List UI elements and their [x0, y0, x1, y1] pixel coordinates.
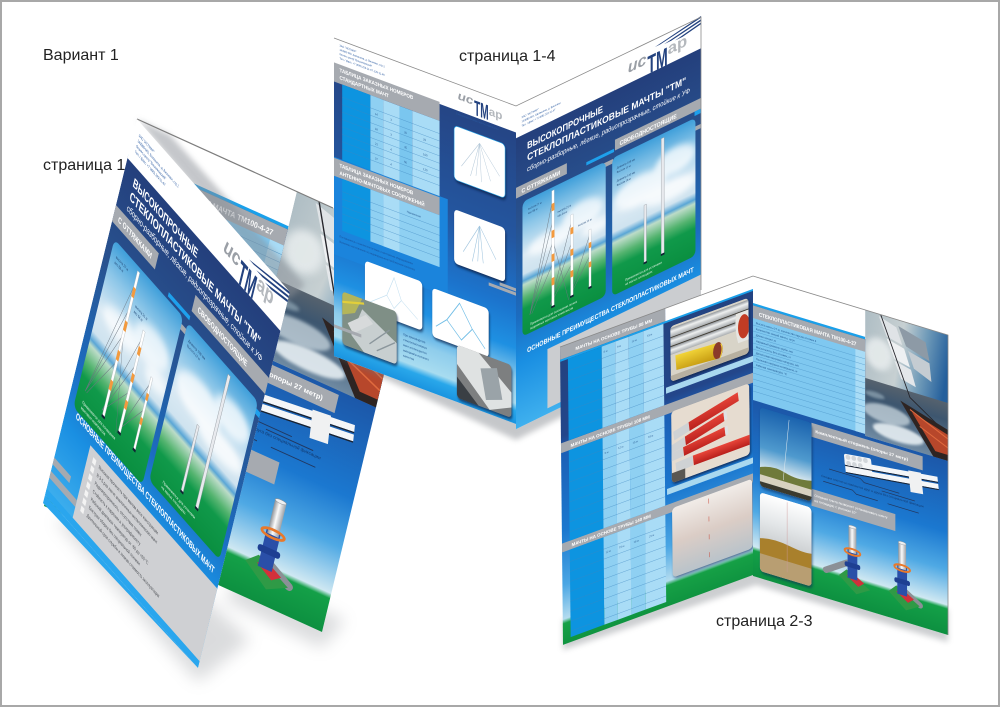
table 1: 4: [390, 147, 392, 152]
tab: guyed: С ОТТЯЖКАМИ: [522, 170, 560, 195]
table values: 21 м: [649, 533, 654, 538]
spec list: [756, 321, 817, 385]
table 1: 27: [375, 156, 378, 162]
page label 1-4 left: страница 1-4: [43, 157, 140, 174]
bottom stripe: [45, 488, 200, 668]
note: подвижных мачтовых комплексов: [530, 306, 573, 331]
note: на малых площадках: [161, 485, 186, 516]
logo: ис: [222, 234, 243, 273]
logo: ТМ: [234, 253, 260, 307]
tab: guyed: [516, 163, 567, 199]
advantages heading: ОСНОВНЫЕ ПРЕИМУЩЕСТВА СТЕКЛОПЛАСТИКОВЫХ МАЧТ: [527, 266, 694, 355]
logo: ТМ: [647, 43, 668, 81]
table 1: 18: [375, 126, 378, 132]
back panel table heading: СТЕКЛОПЛАСТИКОВАЯ МАЧТА ТМ100-4-27: [133, 165, 274, 237]
card: diagram 3: [365, 260, 423, 333]
logo: ар: [668, 32, 687, 59]
advantages text: Стойкость к коррозии и ультрафиолету: [92, 488, 141, 547]
note: Применяются для установки: [625, 260, 662, 282]
main title: СТЕКЛОПЛАСТИКОВЫЕ МАЧТЫ "ТМ": [128, 190, 261, 349]
table values: 12 м: [618, 444, 624, 450]
table heading 108 mm: МАЧТЫ НА ОСНОВЕ ТРУБЫ 108 ММ: [571, 414, 650, 448]
table values: [604, 332, 654, 554]
advantages text: Высокая прочность при малом весе конструкции: [98, 464, 159, 536]
bottom stripes: [334, 220, 516, 395]
advantages text: Длительный срок службы и низкая стоимость эксплуатации: [86, 512, 160, 600]
table 1: 20: [404, 130, 407, 135]
front panel bottom edge wedge: [43, 495, 198, 668]
top edges centre brochure: [334, 17, 701, 290]
note text: мачт используются: [403, 343, 427, 356]
page label 1-4 top: страница 1-4: [459, 48, 556, 65]
specs: [617, 157, 635, 187]
logo: ар: [489, 105, 503, 123]
brochure centre: panel page 4: [334, 38, 516, 424]
address block: бизнес-центр "Вишняковский": [339, 52, 372, 68]
main title: ВЫСОКОПРОЧНЫЕ: [527, 104, 603, 152]
table heading: СТЕКЛОПЛАСТИКОВАЯ МАЧТА ТМ100-4-27: [759, 312, 856, 348]
table 1: 25: [423, 137, 426, 142]
table values: 15 м: [619, 544, 625, 549]
photo: cable drums: [342, 291, 398, 367]
logo: ис: [458, 90, 474, 108]
table 1: 3: [390, 132, 392, 137]
advantages text: Быстрая сборка без специальной техники: [88, 504, 141, 567]
table values: 9 м: [605, 450, 609, 455]
table 2 heading bar: [334, 158, 440, 215]
address block: Тел. / факс: +7 (495) 229-11-47: [522, 107, 556, 128]
table 1: 35: [404, 145, 407, 150]
note text: [403, 332, 429, 367]
foundation note: на площадке с уклоном 10°: [814, 499, 857, 516]
top edge brochure right: [560, 276, 948, 635]
main title: ВЫСОКОПРОЧНЫЕ: [132, 176, 199, 262]
spec list: Наружный диаметр трубы, мм: [756, 339, 793, 354]
tab: free-standing: СВОБОДНОСТОЯЩИЕ: [197, 304, 248, 369]
page label 2-3: страница 2-3: [716, 613, 813, 630]
specs: Диаметр 140 мм: [617, 170, 635, 183]
table 1: [342, 85, 440, 196]
tab: guyed: С ОТТЯЖКАМИ: [117, 214, 153, 261]
address block: 143989 МО, Балашиха, д. Вишняки: [522, 100, 561, 124]
specs: [114, 256, 148, 322]
sky panel: guyed masts: [522, 161, 608, 337]
card: diagram 4: [432, 288, 490, 360]
main title: сборно-разборные, лёгкие, радиопрозрачные, стойкие к УФ: [126, 203, 263, 365]
logo tagline: Стеклопластиковые мачты, композиты: [456, 111, 498, 131]
advantages text: Радиопрозрачность, отсутствие помех: [94, 480, 143, 538]
table values: 15 м: [647, 332, 652, 338]
specs: высота 27 м: [528, 200, 542, 211]
sub-heading: Комплектный стержень (опоры 27 метр): [815, 429, 909, 462]
table heading 88 mm: МАЧТЫ НА ОСНОВЕ ТРУБЫ 88 ММ: [575, 318, 652, 351]
bright block left under tables: [334, 157, 448, 297]
address block: Тел. / факс: +7 (495) 229-11-47: [134, 149, 166, 188]
note: Применяются для установки: [162, 480, 195, 520]
table 2 heading bar: ТАБЛИЦА ЗАКАЗНЫХ НОМЕРОВ: [339, 163, 413, 197]
advantages text: [86, 465, 160, 598]
table 1: 120: [423, 167, 428, 173]
table 2: [342, 179, 440, 267]
table 1: 4: [390, 162, 392, 167]
advantages heading: ОСНОВНЫЕ ПРЕИМУЩЕСТВА СТЕКЛОПЛАСТИКОВЫХ МАЧТ: [75, 410, 216, 576]
specs: высота 27 м: [115, 255, 129, 273]
table 1: 3: [390, 117, 392, 122]
fold shadow on back panel: [137, 119, 305, 300]
sky panel: guyed masts: [73, 239, 185, 487]
back panel joint note: Секции плотно вставляются друг в друга без специальной фиксации: [181, 392, 322, 461]
top edge line left brochure: [137, 119, 333, 208]
note lines: Возможно изготовление по индивидуальным требованиям заказчика: [339, 239, 415, 272]
address block: [522, 96, 561, 128]
address block: бизнес-центр "Вишняковский": [136, 144, 167, 182]
table values: 18 м: [634, 538, 639, 544]
advantages panel: [547, 274, 701, 408]
address block: 143989 МО, Балашиха, д. Вишняки, стр.1: [339, 48, 385, 69]
specs: вес 64 кг: [133, 309, 143, 324]
tab: free-standing: [192, 295, 269, 394]
spec list: Полезная нагрузка на вершине, кг: [756, 357, 798, 373]
table 1: 50: [404, 160, 407, 165]
note text: материалы высокого: [403, 348, 429, 362]
table 2: Назначение: [407, 209, 421, 219]
advantages text: В 3-5 раз легче аналогичных металлических мачт: [96, 472, 158, 545]
table values: 12 м: [632, 338, 637, 344]
accent stripes: [164, 292, 264, 418]
table values: 6 м: [604, 348, 608, 354]
shadow under centre brochure: [340, 300, 705, 440]
advantages text: Рабочий диапазон температур от -60 до +60 °С: [90, 496, 149, 566]
specs: вес 88 кг: [114, 260, 124, 274]
address block: ЗАО "ИСТМАР": [339, 43, 356, 54]
address block: ЗАО "ИСТМАР": [138, 133, 155, 155]
brochure left: front panel: [45, 119, 290, 668]
specs: высота 21 м: [558, 203, 571, 214]
logo: [224, 242, 273, 304]
accent stripes: [586, 106, 701, 184]
note lines: Поставляются с комплектом оттяжек и монтажным оборудованием: [339, 234, 413, 266]
specs: вес 64 кг: [558, 209, 567, 218]
table 1 heading bar: ТАБЛИЦА ЗАКАЗНЫХ НОМЕРОВ: [339, 68, 413, 102]
back panel sub-heading: Комплектный стержень (опоры 27 метр): [183, 331, 324, 402]
specs: высота 14 м: [578, 217, 592, 228]
specs: Высота 12 м: [617, 163, 631, 174]
card: guyed diagram 2: [454, 209, 506, 285]
table 1: 100: [423, 152, 428, 158]
advantages panel: [73, 445, 217, 661]
table values: 12 м: [606, 549, 611, 554]
logo: [628, 31, 687, 90]
table heading 140 mm: МАЧТЫ НА ОСНОВЕ ТРУБЫ 140 ММ: [572, 513, 651, 548]
sky panel: free-standing masts: [612, 118, 695, 296]
specs: Высота 18 м: [617, 176, 631, 187]
note text: При производстве: [403, 332, 426, 345]
table 1 heading bar: [334, 62, 440, 121]
specs: вес 88 кг: [528, 207, 538, 215]
shadow under brochure 2-3: [563, 560, 948, 650]
tab: guyed: [112, 205, 159, 270]
specs: [528, 176, 592, 252]
table 1: 14: [375, 112, 378, 117]
main title: СТЕКЛОПЛАСТИКОВЫЕ МАЧТЫ "ТМ": [527, 75, 686, 164]
variant heading: Вариант 1: [43, 47, 119, 64]
brochure left: back panel: [44, 119, 415, 632]
note text: стеклопластиковых: [403, 337, 427, 351]
note: на малых площадках: [625, 269, 653, 287]
logo: ар: [255, 271, 276, 311]
address block: [339, 43, 385, 77]
shadows under left brochure: [55, 520, 345, 682]
joint note: Секции плотно вставляются друг в друга без специальной фиксации: [821, 474, 924, 509]
main title: сборно-разборные, лёгкие, радиопрозрачные, стойкие к УФ: [527, 86, 690, 174]
table 1: 21: [375, 141, 378, 147]
table 1 heading bar: СТАНДАРТНЫХ МАЧТ: [339, 75, 389, 100]
spec list: Масса мачты без оттяжек, кг: [756, 345, 791, 359]
specs: Высота 12 м: [187, 343, 201, 362]
note: Применяются для оснащения: [82, 399, 116, 441]
spec list: Допустимая ветровая нагрузка, м/с: [756, 351, 800, 368]
note: мачтовых комплексов: [81, 404, 106, 437]
address block: 143989 МО, Балашиха, д. Вишняки, стр.1: [137, 138, 179, 189]
table 2 heading bar: АНТЕННО-МАЧТОВЫХ СООРУЖЕНИЙ: [339, 168, 425, 209]
spec list: Длина секции, м: [756, 333, 776, 343]
brochure right: right panel page 3: [753, 276, 948, 635]
brochure right: left panel page 2: [560, 276, 756, 645]
sky panel: free-standing masts: [149, 322, 258, 560]
table values: 15 м: [633, 439, 638, 445]
specs: высота 21 м: [135, 304, 148, 322]
tab: free-standing: [615, 98, 701, 150]
brochure centre: front panel page 1: [516, 16, 701, 429]
logo: ис: [628, 51, 647, 77]
address block: Тел. / факс: +7 (495) 229-11-47, 229-11-48: [339, 56, 385, 77]
bullets: [80, 457, 96, 514]
specs: Диаметр 108 мм: [617, 157, 635, 170]
left stripes: [49, 457, 80, 507]
address block: ЗАО "ИСТМАР": [522, 107, 539, 119]
foundation note: Опорная плита позволяет устанавливать мачту: [814, 494, 888, 520]
note: Применяются для оснащения легких: [530, 299, 577, 326]
photo: tube closeup: [457, 345, 512, 421]
spec list: Рабочая температура, °С: [756, 363, 787, 376]
logo: ТМ: [474, 97, 489, 125]
note text: качества: [403, 353, 414, 362]
spec list: Количество секций мачты, штук: [756, 327, 796, 343]
table values: 18 м: [648, 433, 653, 439]
specs: Диаметр 108 мм: [188, 338, 206, 362]
card: guyed diagram 1: [454, 125, 506, 201]
spec list: Высота мачты 27 м, количество ярусов оттяжек 4: [756, 321, 817, 343]
tab: free-standing: СВОБОДНОСТОЯЩИЕ: [620, 114, 677, 148]
table values: 9 м: [617, 343, 621, 349]
logo: [458, 90, 503, 131]
